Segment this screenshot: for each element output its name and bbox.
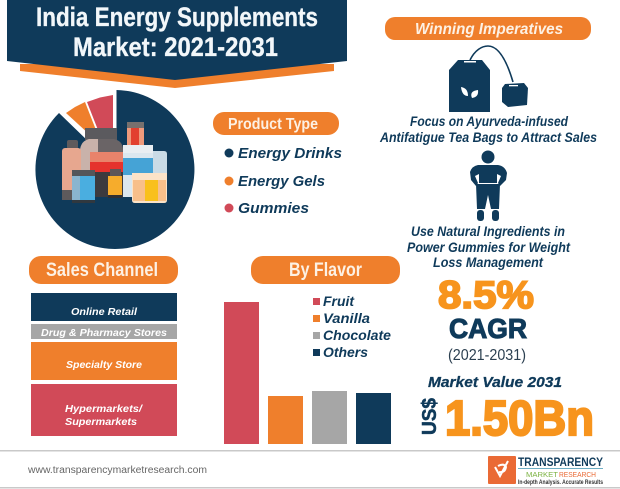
text: gummies imperative [407, 223, 571, 270]
logo: transparency market research [488, 455, 604, 486]
segment: hypermarkets and supermarkets: Supermarkets [65, 417, 137, 428]
market value stat: Market Value 2031 [428, 374, 562, 391]
CAGR stat: (2021-2031) [448, 347, 526, 364]
sales channel heading: Sales Channel [46, 260, 158, 281]
segment: online retail: Online Retail [71, 307, 137, 318]
flavor legend [313, 293, 391, 360]
CAGR stat [438, 274, 534, 364]
text: tea bag imperative [379, 113, 597, 145]
logo: transparency market research: RESEARCH [559, 470, 596, 479]
by flavor heading [251, 256, 400, 284]
sales channel stacked bar [31, 293, 177, 436]
segment: online retail [31, 293, 177, 321]
flavor legend: Chocolate [323, 327, 391, 343]
flavor bar chart [224, 302, 391, 444]
CAGR stat: CAGR [449, 313, 527, 344]
market value stat: 1.50Bn [445, 392, 594, 446]
winning imperatives heading [385, 17, 591, 40]
logo: transparency market research: In-depth Analysis. Accurate Results [518, 480, 604, 486]
title banner [7, 0, 347, 88]
product type legend: Energy Gels [238, 173, 325, 190]
bottles [62, 122, 167, 203]
flavor legend: Others [323, 344, 368, 360]
pie chart with supplement bottles [35, 90, 194, 249]
segment: specialty store [31, 342, 177, 380]
text: gummies imperative: Use Natural Ingredients in [411, 223, 565, 239]
product type legend: Gummies [238, 200, 309, 217]
market value stat: US$ [419, 398, 441, 435]
logo: transparency market research: TRANSPARENCY [518, 455, 603, 469]
website url: www.transparencymarketresearch.com [27, 465, 207, 476]
segment: drug and pharmacy stores: Drug & Pharmacy Stores [41, 328, 167, 339]
sales channel heading [29, 256, 178, 284]
market value stat [419, 374, 594, 446]
text: gummies imperative: Loss Management [433, 254, 544, 270]
product type legend [224, 145, 342, 217]
segment: drug and pharmacy stores [31, 324, 177, 339]
footer rules [0, 450, 620, 488]
flavor legend: Vanilla [323, 310, 370, 326]
icon: tea bag [449, 46, 528, 112]
text: gummies imperative: Power Gummies for Weight [407, 239, 571, 255]
winning imperatives heading: Winning Imperatives [415, 21, 563, 38]
flavor legend: Fruit [323, 293, 355, 309]
title banner: Market: 2021-2031 [73, 32, 278, 62]
CAGR stat: 8.5% [438, 274, 534, 317]
text: tea bag imperative: Focus on Ayurveda-infused [410, 113, 568, 129]
by flavor heading: By Flavor [289, 260, 363, 281]
logo: transparency market research: MARKET [526, 470, 558, 479]
segment: hypermarkets and supermarkets: Hypermarkets/ [65, 404, 143, 415]
product type legend: Energy Drinks [238, 145, 342, 162]
product type heading: Product Type [228, 116, 318, 133]
text: tea bag imperative: Antifatigue Tea Bags to Attract Sales [379, 129, 597, 145]
title banner: India Energy Supplements [36, 2, 318, 32]
segment: hypermarkets and supermarkets [31, 384, 177, 436]
icon: person with loose waist [470, 150, 507, 221]
pie slices [35, 90, 194, 249]
segment: specialty store: Specialty Store [66, 360, 142, 371]
product type heading [213, 112, 339, 135]
